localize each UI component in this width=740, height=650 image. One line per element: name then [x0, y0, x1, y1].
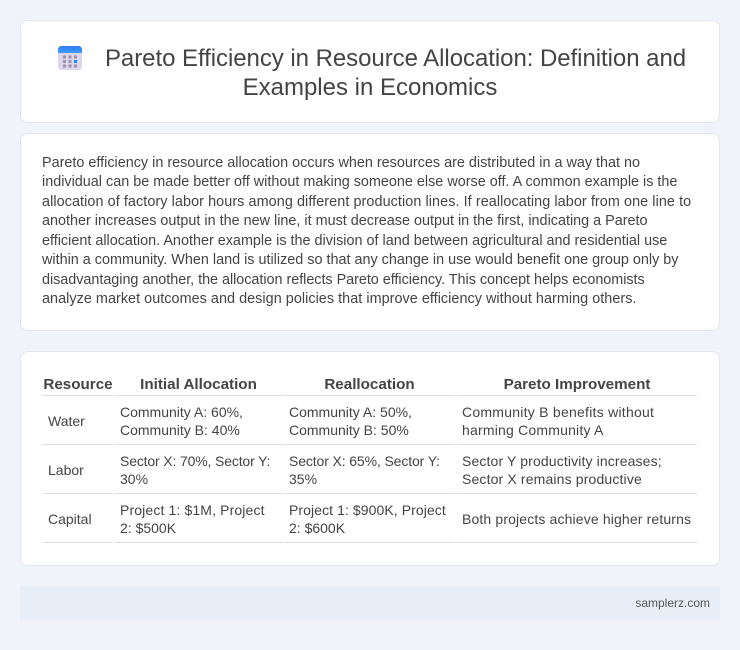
text: Pareto Efficiency in Resource Allocation: Definition and: [105, 45, 686, 72]
text: 2: $600K: [289, 520, 345, 536]
panel: description: [20, 133, 720, 331]
text: individual can be made better off without making someone else worse off. A common example is the: [42, 174, 677, 190]
text: Examples in Economics: [243, 74, 497, 101]
row: water: [48, 404, 654, 438]
text: Labor: [48, 462, 84, 478]
footer bar: [20, 586, 720, 620]
footer source label: samplerz.com: [635, 596, 710, 610]
text: Resource: [43, 376, 113, 393]
text: Community A: 50%,: [289, 404, 412, 420]
text: Sector Y productivity increases;: [462, 453, 662, 469]
text: 2: $500K: [120, 520, 176, 536]
text: Water: [48, 413, 85, 429]
description text: [42, 155, 691, 307]
text: Reallocation: [324, 376, 415, 393]
text: Capital: [48, 511, 92, 527]
title: [105, 45, 686, 101]
text: analyze market outcomes and design policies that improve efficiency without harming others.: [42, 291, 636, 307]
text: Pareto Improvement: [504, 376, 650, 393]
text: Sector X: 65%, Sector Y:: [289, 453, 440, 469]
text: efficient allocation. Another example is the division of land between agricultural and residential use: [42, 233, 667, 249]
text: Project 1: $900K, Project: [289, 502, 446, 518]
text: Community B benefits without: [462, 404, 654, 420]
row: labor: [48, 453, 662, 487]
title card: [20, 20, 720, 123]
text: Community B: 50%: [289, 422, 409, 438]
text: another increases output in the new line, it must decrease output in the first, indicating a Pareto: [42, 213, 648, 229]
text: Both projects achieve higher returns: [462, 511, 691, 527]
text: Community B: 40%: [120, 422, 240, 438]
text: 30%: [120, 471, 148, 487]
text: Project 1: $1M, Project: [120, 502, 265, 518]
text: Sector X remains productive: [462, 471, 642, 487]
panel: table card: [20, 351, 720, 566]
text: within a community. When land is utilized so that any change in use would benefit one group only by: [42, 252, 678, 268]
table: [43, 376, 697, 543]
icon: calendar grid: [58, 46, 82, 70]
text: disadvantaging another, the allocation reflects Pareto efficiency. This concept helps economists: [42, 272, 645, 288]
table header: [43, 376, 650, 393]
text: Community A: 60%,: [120, 404, 243, 420]
text: Initial Allocation: [140, 376, 257, 393]
text: harming Community A: [462, 422, 604, 438]
text: allocation of factory labor hours among different production lines. If reallocating labor from one line to: [42, 194, 691, 210]
text: Pareto efficiency in resource allocation occurs when resources are distributed in a way that no: [42, 155, 640, 171]
text: Sector X: 70%, Sector Y:: [120, 453, 270, 469]
text: 35%: [289, 471, 317, 487]
row: capital: [48, 502, 691, 536]
